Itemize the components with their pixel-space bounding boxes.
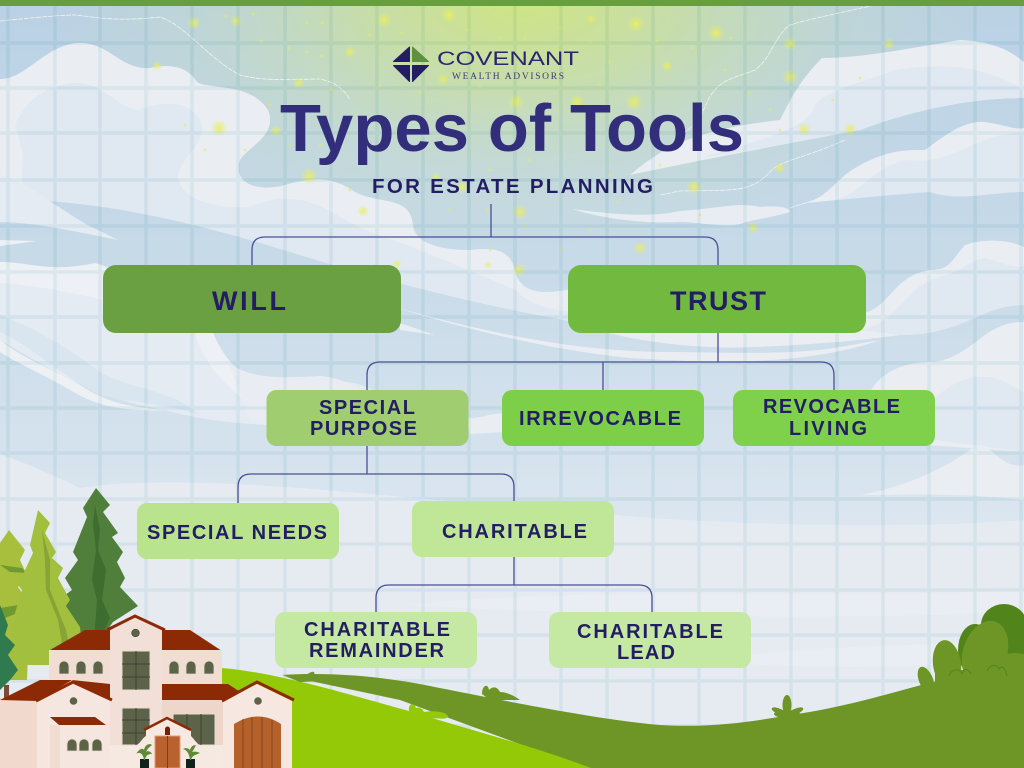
box: charitable lead: LEAD <box>617 642 675 664</box>
box: charitable lead: CHARITABLE <box>577 621 723 643</box>
trees <box>0 488 138 699</box>
tower windows <box>122 651 215 745</box>
grass tufts <box>409 695 804 719</box>
box: charitable remainder: REMAINDER <box>309 640 445 662</box>
box: trust <box>568 265 866 333</box>
box: special needs <box>137 503 339 559</box>
logo <box>394 47 579 82</box>
box: charitable: CHARITABLE <box>442 521 587 543</box>
house <box>0 616 294 768</box>
sparkles <box>152 7 895 277</box>
box: charitable <box>412 501 614 557</box>
central tower <box>110 617 162 748</box>
upper wing roofs <box>50 630 222 651</box>
left lower wall <box>0 698 112 768</box>
connector lines <box>238 204 834 612</box>
garage door <box>234 716 281 768</box>
logo wordmark: COVENANT <box>437 48 579 70</box>
entry <box>132 719 205 768</box>
box: irrevocable <box>502 390 704 446</box>
title: Types of Tools <box>280 91 744 166</box>
box: charitable remainder <box>275 612 477 668</box>
hills <box>222 660 1024 768</box>
box: special needs: SPECIAL NEEDS <box>147 522 327 544</box>
subtitle: FOR ESTATE PLANNING <box>372 175 653 198</box>
box: revocable living: REVOCABLE <box>763 396 900 418</box>
box: revocable living <box>733 390 935 446</box>
left roof and gable <box>0 680 72 701</box>
box: irrevocable: IRREVOCABLE <box>519 408 681 430</box>
small round windows <box>70 629 262 705</box>
box: trust: TRUST <box>670 286 766 316</box>
upper wing walls <box>49 650 222 704</box>
lower right roof and wall <box>160 684 245 701</box>
box: charitable remainder: CHARITABLE <box>304 619 450 641</box>
box: revocable living: LIVING <box>789 418 867 440</box>
logo mark <box>394 47 428 82</box>
box: special purpose: PURPOSE <box>310 418 417 440</box>
box: will: WILL <box>212 286 286 316</box>
box: will <box>103 265 401 333</box>
sparkle dots <box>184 12 862 252</box>
top bar <box>0 0 1024 6</box>
box: special purpose: SPECIAL <box>319 397 415 419</box>
lower facade wall <box>108 745 226 768</box>
logo tagline: WEALTH ADVISORS <box>452 72 564 82</box>
bush <box>914 604 1024 720</box>
box: charitable lead <box>549 612 751 668</box>
arched windows <box>59 661 214 751</box>
box: special purpose <box>266 390 468 446</box>
small left roof <box>50 717 106 725</box>
potted plants <box>136 744 200 768</box>
right wing gable <box>223 684 292 768</box>
